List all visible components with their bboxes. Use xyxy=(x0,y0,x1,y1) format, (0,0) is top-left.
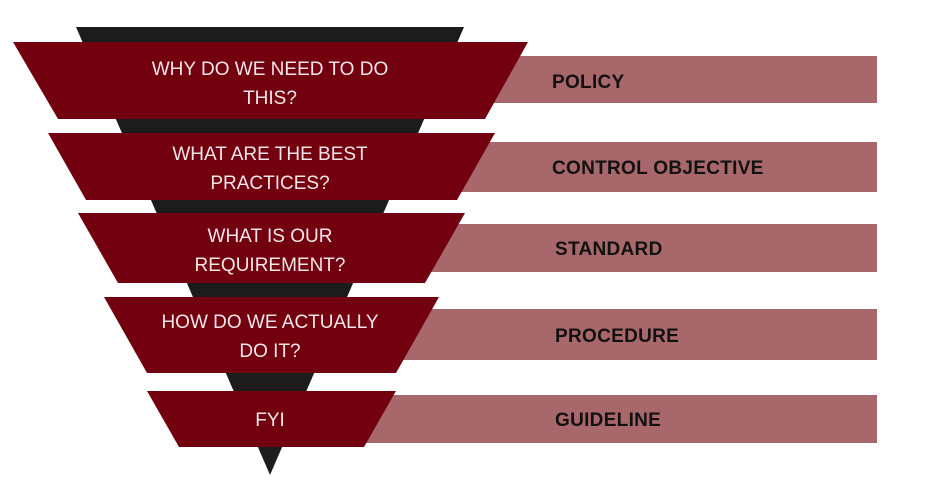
label bar: control objective xyxy=(420,142,877,192)
band 2: best practices: PRACTICES? xyxy=(210,173,330,194)
black funnel triangle xyxy=(76,27,464,475)
band 4: how: HOW DO WE ACTUALLY xyxy=(161,312,379,333)
label bar: policy xyxy=(420,56,877,103)
band 3: requirement: WHAT IS OUR xyxy=(208,226,332,247)
label bar: guideline xyxy=(340,395,877,443)
label bar: standard: STANDARD xyxy=(555,239,663,260)
band 4: how xyxy=(104,297,439,373)
band 4: how: DO IT? xyxy=(239,341,301,362)
band 2: best practices xyxy=(48,133,495,200)
band 1: why: THIS? xyxy=(243,88,297,109)
band 5: fyi: FYI xyxy=(255,410,285,431)
band 2: best practices: WHAT ARE THE BEST xyxy=(172,144,368,165)
label bar: standard xyxy=(400,224,877,272)
band 3: requirement: REQUIREMENT? xyxy=(195,255,345,276)
band 3: requirement xyxy=(78,213,465,283)
label bar: policy: POLICY xyxy=(552,72,625,93)
label bar: procedure xyxy=(380,309,877,360)
band 1: why: WHY DO WE NEED TO DO xyxy=(152,59,388,80)
label bar: procedure: PROCEDURE xyxy=(555,326,679,347)
band 5: fyi xyxy=(147,391,396,447)
label bar: control objective: CONTROL OBJECTIVE xyxy=(552,158,764,179)
band 1: why xyxy=(13,42,528,119)
label bar: guideline: GUIDELINE xyxy=(555,410,661,431)
